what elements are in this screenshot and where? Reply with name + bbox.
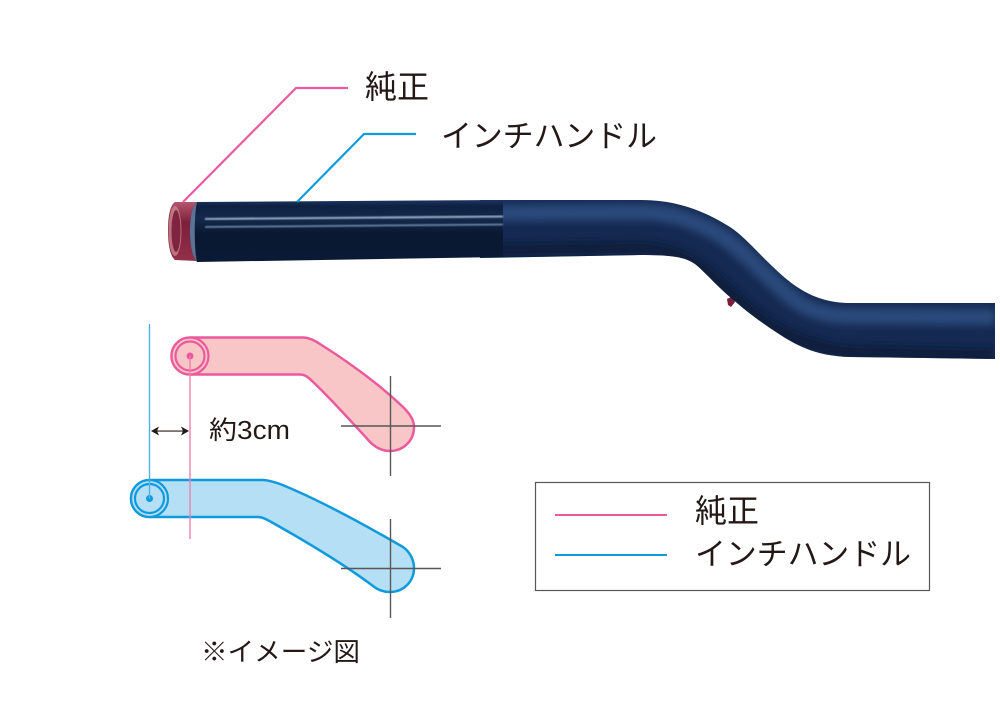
navy bar body with bend <box>480 200 995 359</box>
diagram: inch bar shape <box>131 480 414 592</box>
photo: handlebar <box>168 200 995 359</box>
legend line: inch handlebar <box>555 554 667 556</box>
inch handlebar dark glossy sleeve <box>190 200 503 262</box>
legend line: standard <box>555 514 667 516</box>
label: about 3 cm: 約3cm <box>209 417 290 445</box>
label: inch handlebar: インチハンドル <box>441 119 657 154</box>
diagram: standard bar shape <box>172 338 414 451</box>
legend text: inch handlebar: インチハンドル <box>695 537 911 572</box>
guide line: standard bar centre <box>189 356 191 539</box>
crosshair: inch bar end <box>341 519 441 618</box>
label: standard: 純正 <box>365 69 429 105</box>
leader line: standard <box>183 88 348 202</box>
arrow: offset between centres <box>151 426 189 436</box>
guide line: inch bar centre <box>148 324 150 499</box>
crosshair: standard bar end <box>341 376 441 476</box>
small red tab on the bar <box>727 296 735 307</box>
note: image diagram: ※イメージ図 <box>201 637 360 667</box>
legend text: standard: 純正 <box>695 493 759 529</box>
legend <box>536 482 930 590</box>
standard handlebar end in red <box>168 202 197 261</box>
leader line: inch handlebar <box>297 134 416 202</box>
